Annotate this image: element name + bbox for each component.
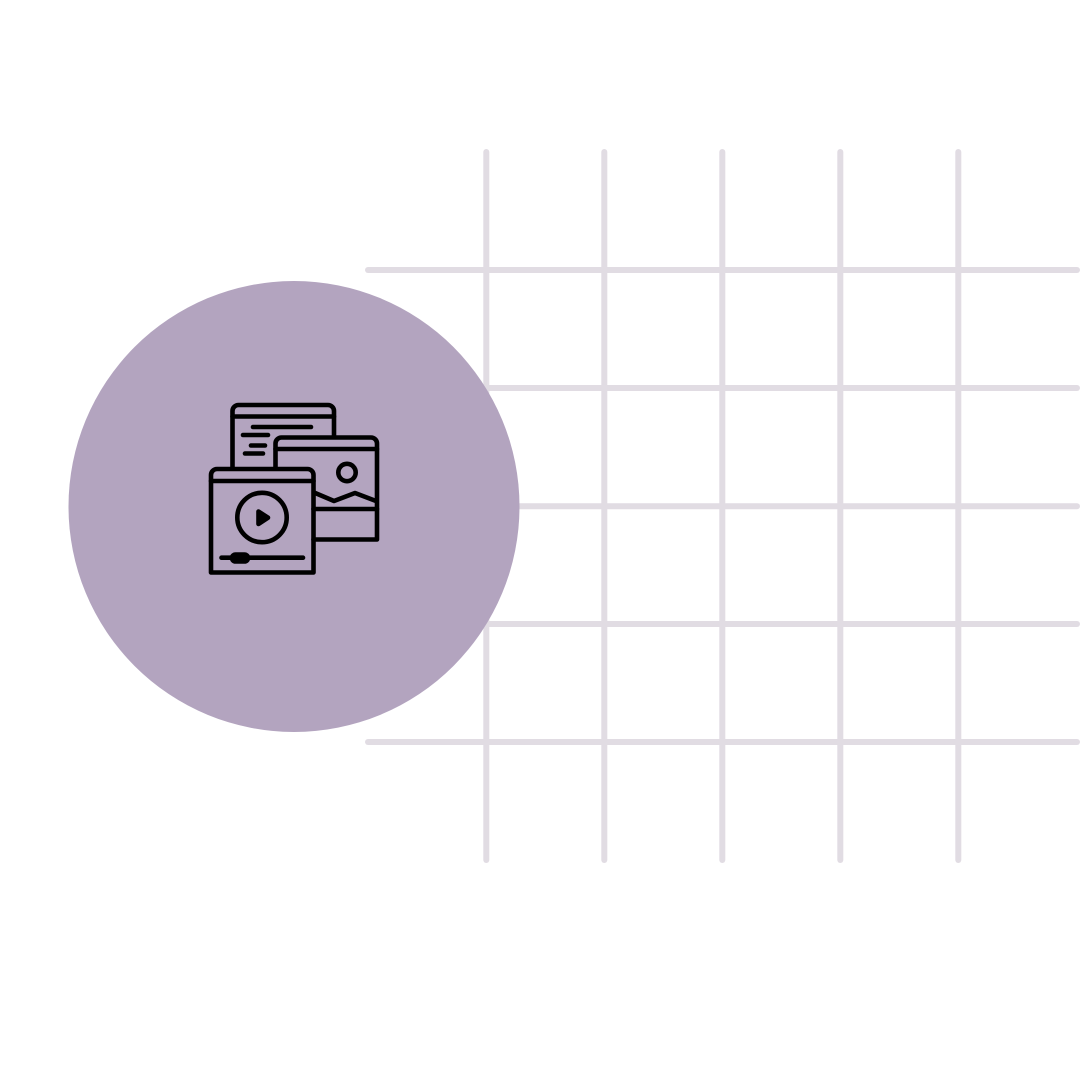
icon: media windows — [211, 405, 377, 572]
purple circle — [68, 281, 520, 732]
grid of lines — [368, 152, 1077, 860]
icon: middle image window — [276, 438, 377, 540]
icon: back text window — [232, 405, 334, 468]
icon: front video window — [211, 469, 314, 572]
